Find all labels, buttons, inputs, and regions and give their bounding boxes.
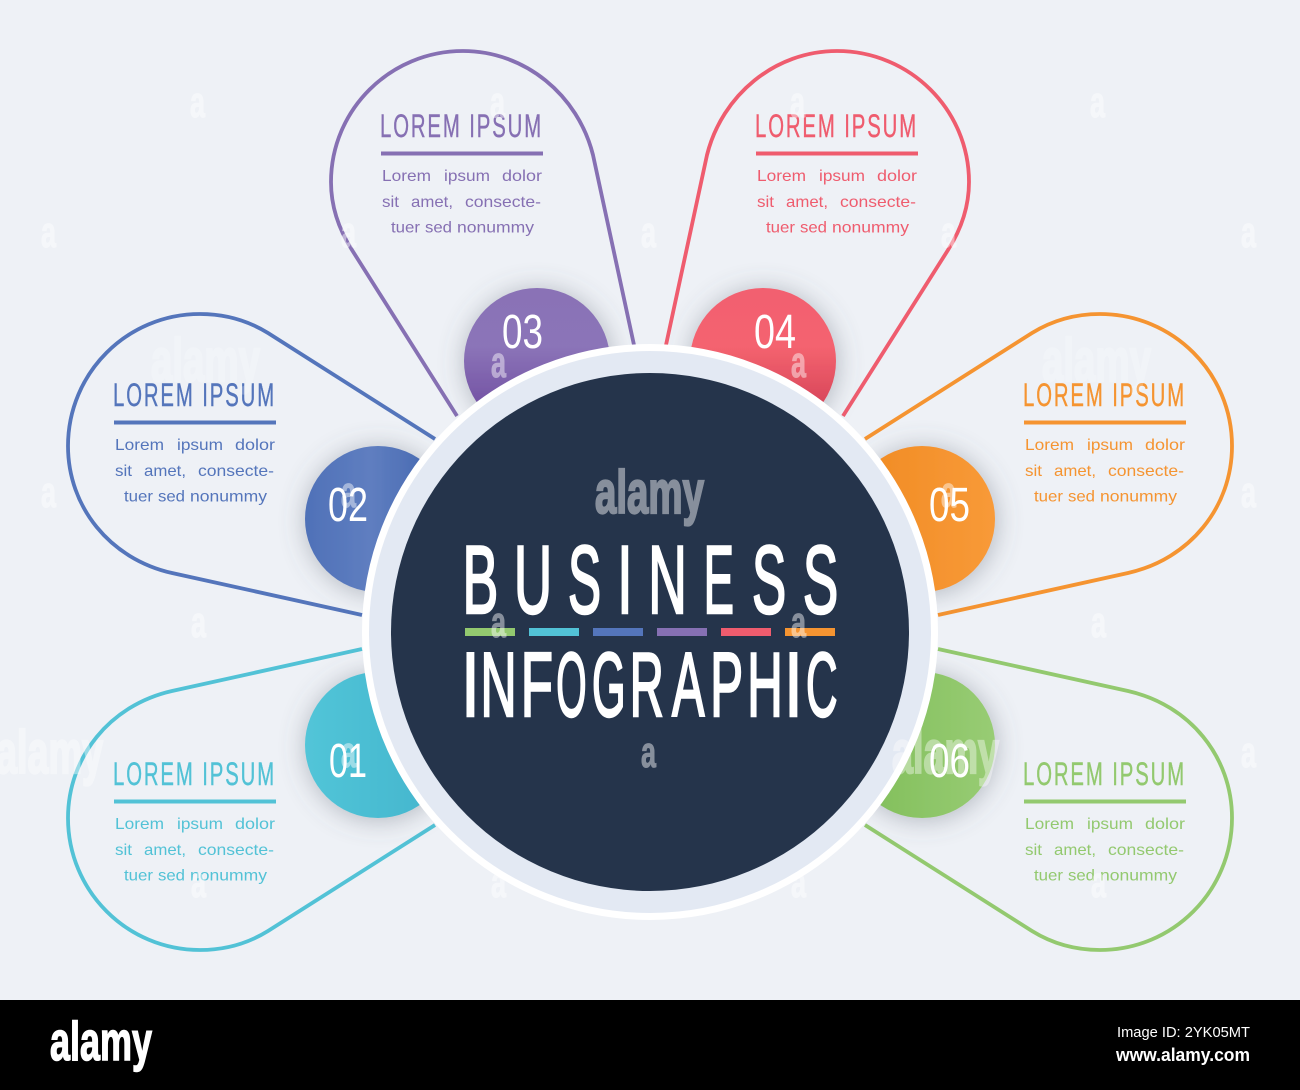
alamy watermark: alamy <box>0 719 103 786</box>
panel 03: purple petal <box>331 51 634 416</box>
title: business: I <box>617 526 633 634</box>
panel 06: green petal: tuer <box>1034 868 1064 884</box>
number badge 06 <box>849 672 995 818</box>
alamy watermark: a <box>791 598 806 647</box>
alamy watermark: a <box>1241 728 1256 777</box>
central circle <box>366 348 934 916</box>
alamy watermark: a <box>941 468 956 517</box>
panel 02: blue petal: consecte- <box>198 463 274 480</box>
panel 04: red petal: consecte- <box>840 194 916 211</box>
number badge 03 <box>464 288 610 434</box>
panel 01: cyan petal: amet, <box>144 842 186 859</box>
alamy watermark: a <box>491 858 506 907</box>
panel 05: orange petal <box>865 314 1232 615</box>
panel 06: green petal: sit <box>1025 842 1043 859</box>
panel 01: cyan petal <box>68 649 435 950</box>
alamy watermark: alamy <box>892 719 999 786</box>
panel 01: cyan petal: sed <box>158 868 185 884</box>
panel 02: blue petal: ipsum <box>177 437 223 454</box>
panel 05: orange petal: consecte- <box>1108 463 1184 480</box>
panel 03: purple petal: sit <box>382 194 400 211</box>
alamy watermark: a <box>1090 78 1105 127</box>
panel 01: cyan petal: consecte- <box>198 842 274 859</box>
title: infographic: O <box>556 635 587 736</box>
panel 03: purple petal: amet, <box>411 194 453 211</box>
title: business: S <box>752 526 786 634</box>
panel 05: orange petal: tuer <box>1034 488 1064 506</box>
alamy watermark: a <box>41 468 56 517</box>
panel 01: cyan petal: tuer <box>124 868 154 884</box>
panel 02: blue petal: LOREM IPSUM <box>113 377 276 413</box>
panel 06: green petal: ipsum <box>1087 816 1133 833</box>
text: C <box>806 635 838 736</box>
panel 03: purple petal: LOREM IPSUM <box>380 108 543 144</box>
alamy watermark: a <box>790 78 805 127</box>
panel 01: cyan petal: ipsum <box>177 816 223 833</box>
panel 03: purple petal: ipsum <box>444 168 490 185</box>
panel 05: orange petal: Lorem <box>1025 437 1074 454</box>
alamy watermark: a <box>1241 468 1256 517</box>
title: business: S <box>803 526 838 634</box>
alamy watermark: a <box>641 728 656 777</box>
number badge 01: 01 <box>329 735 367 788</box>
panel 05: orange petal: ipsum <box>1087 437 1133 454</box>
title: business: E <box>704 526 734 634</box>
panel 04: red petal: LOREM IPSUM <box>755 108 918 144</box>
panel 04: red petal: Lorem <box>757 168 806 185</box>
number badge 04 <box>690 288 836 434</box>
number badge 06: 06 <box>929 735 970 788</box>
number badge 05 <box>849 446 995 592</box>
panel 05: orange petal: nonummy <box>1100 488 1177 506</box>
alamy watermark: a <box>341 468 356 517</box>
panel 02: blue petal: dolor <box>235 437 276 454</box>
alamy watermark: a <box>191 858 206 907</box>
panel 01: cyan petal: LOREM IPSUM <box>113 756 276 792</box>
number badge 02: 02 <box>328 479 368 532</box>
alamy watermark: a <box>491 598 506 647</box>
footer bar: www.alamy.com <box>1115 1045 1250 1065</box>
panel 01: cyan petal: sit <box>115 842 133 859</box>
panel 06: green petal: LOREM IPSUM <box>1023 756 1186 792</box>
panel 05: orange petal: sed <box>1068 488 1095 506</box>
title: business: N <box>648 526 687 634</box>
panel 06: green petal: sed <box>1068 868 1095 884</box>
title: business: U <box>514 526 552 634</box>
panel 06: green petal: Lorem <box>1025 816 1074 833</box>
footer bar: Image ID: 2YK05MT <box>1117 1024 1250 1041</box>
alamy watermark: a <box>1091 598 1106 647</box>
footer bar: alamy <box>50 1010 152 1072</box>
panel 03: purple petal: nonummy <box>457 220 534 236</box>
panel 02: blue petal: tuer <box>124 488 154 506</box>
alamy watermark: a <box>41 208 56 257</box>
alamy watermark: a <box>1241 208 1256 257</box>
panel 04: red petal: ipsum <box>819 168 865 185</box>
alamy watermark: alamy <box>151 327 260 394</box>
panel 04: red petal: dolor <box>877 168 918 185</box>
number badge 04: 04 <box>754 306 796 359</box>
number badge 03: 03 <box>502 306 543 359</box>
alamy watermark: a <box>641 208 656 257</box>
panel 03: purple petal: dolor <box>502 168 543 185</box>
panel 06: green petal <box>865 649 1232 950</box>
panel 04: red petal: tuer <box>766 220 796 236</box>
panel 06: green petal: amet, <box>1054 842 1096 859</box>
alamy watermark: alamy <box>595 459 704 526</box>
panel 03: purple petal: consecte- <box>465 194 541 211</box>
title: infographic: A <box>672 635 705 736</box>
title: infographic: N <box>480 635 517 736</box>
panel 05: orange petal: dolor <box>1145 437 1186 454</box>
panel 04: red petal: amet, <box>786 194 828 211</box>
colour dash divider <box>465 628 835 636</box>
alamy watermark <box>0 78 1256 907</box>
title: business: S <box>568 526 601 634</box>
alamy watermark: a <box>1091 858 1106 907</box>
panel 02: blue petal: sit <box>115 463 133 480</box>
alamy watermark: a <box>791 858 806 907</box>
panel 04: red petal: sed <box>800 220 827 236</box>
panel 04: red petal <box>666 51 969 416</box>
panel 01: cyan petal: Lorem <box>115 816 164 833</box>
panel 01: cyan petal: dolor <box>235 816 276 833</box>
panel 06: green petal: nonummy <box>1100 868 1177 884</box>
panel 05: orange petal: sit <box>1025 463 1043 480</box>
alamy watermark: a <box>791 338 806 387</box>
panel 03: purple petal: tuer <box>391 220 421 236</box>
panel 03: purple petal: sed <box>425 220 452 236</box>
title: infographic: I <box>461 635 480 736</box>
panel 03: purple petal: Lorem <box>382 168 431 185</box>
alamy watermark: a <box>191 598 206 647</box>
panel 02: blue petal: sed <box>158 488 185 506</box>
alamy watermark: alamy <box>1042 327 1151 394</box>
panel 02: blue petal: amet, <box>144 463 186 480</box>
number badge 05: 05 <box>929 479 970 532</box>
panel 04: red petal: sit <box>757 194 775 211</box>
title: infographic: R <box>630 635 664 736</box>
title: infographic: H <box>747 635 783 736</box>
alamy watermark: a <box>941 208 956 257</box>
title: infographic: G <box>592 635 626 736</box>
number badge 02 <box>305 446 451 592</box>
panel 02: blue petal <box>68 314 435 615</box>
panel 05: orange petal: amet, <box>1054 463 1096 480</box>
alamy watermark: a <box>341 208 356 257</box>
panel 06: green petal: dolor <box>1145 816 1186 833</box>
alamy watermark: a <box>190 78 205 127</box>
panel 01: cyan petal: nonummy <box>190 868 267 884</box>
panel 02: blue petal: nonummy <box>190 488 267 506</box>
title: infographic: I <box>784 635 802 736</box>
title: business: B <box>462 526 498 634</box>
panel 06: green petal: consecte- <box>1108 842 1184 859</box>
title: infographic: P <box>710 635 743 736</box>
alamy watermark: a <box>491 338 506 387</box>
title: infographic: F <box>521 635 553 736</box>
panel 02: blue petal: Lorem <box>115 437 164 454</box>
panel 05: orange petal: LOREM IPSUM <box>1023 377 1186 413</box>
alamy watermark: a <box>490 78 505 127</box>
number badge 01 <box>305 672 451 818</box>
panel 04: red petal: nonummy <box>832 220 909 236</box>
alamy watermark: a <box>341 728 356 777</box>
footer bar <box>0 1000 1300 1090</box>
